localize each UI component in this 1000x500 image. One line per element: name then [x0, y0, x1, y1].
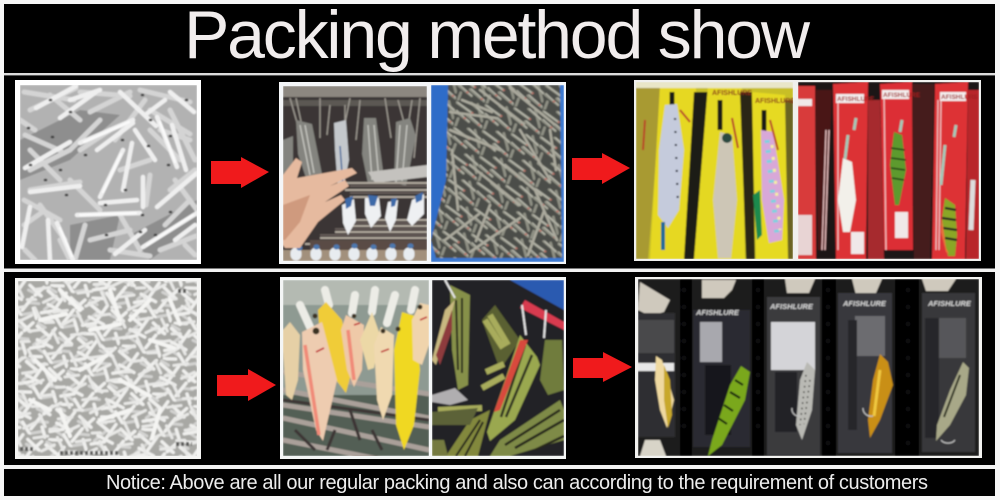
logo: card brand: AFISHLURE	[837, 96, 875, 103]
logo: box brand: AFISHLURE	[695, 308, 740, 317]
logo: box brand: AFISHLURE	[769, 302, 814, 311]
row 1: soft plastic lures to finished yellow and red cards	[15, 80, 981, 264]
notice	[4, 469, 995, 496]
arrow	[217, 369, 276, 401]
photo: silver lures in blue tub	[431, 85, 564, 262]
photo: yellow card packs	[636, 82, 795, 259]
photo: yellow and peach baits drying	[283, 280, 429, 460]
photo: red card packs	[798, 82, 979, 259]
photo: hand holding lure over rack	[283, 86, 427, 261]
photo: red card packs: AFISHLURE	[941, 94, 979, 101]
photo pair: painted baits on racks and striped baits	[280, 277, 566, 460]
logo: box brand	[695, 299, 972, 317]
photo: white raw minnow blanks	[15, 278, 201, 459]
photo: red card packs: AFISHLURE	[883, 92, 921, 99]
photo pair: painted lures on racks and in blue tub	[279, 82, 566, 264]
arrow	[572, 153, 630, 184]
row 2: hard bait blanks to finished clear boxes	[15, 277, 982, 460]
photo: olive striped baits	[432, 280, 564, 456]
arrow	[211, 157, 269, 188]
logo: box brand: AFISHLURE	[927, 299, 972, 308]
photo: clear box packaging on pegboard	[635, 277, 982, 458]
arrow	[573, 352, 632, 382]
logo: card brand: AFISHLURE	[712, 90, 752, 97]
photo: clear raw lure bodies	[15, 80, 201, 264]
logo: box brand: AFISHLURE	[842, 299, 887, 308]
photo pair: finished card packaging	[634, 80, 981, 261]
title band	[4, 0, 995, 73]
notice: Notice: Above are all our regular packing and also can according to the requirement of customers	[106, 472, 928, 494]
photo: yellow card packs: AFISHLURE	[755, 98, 795, 105]
